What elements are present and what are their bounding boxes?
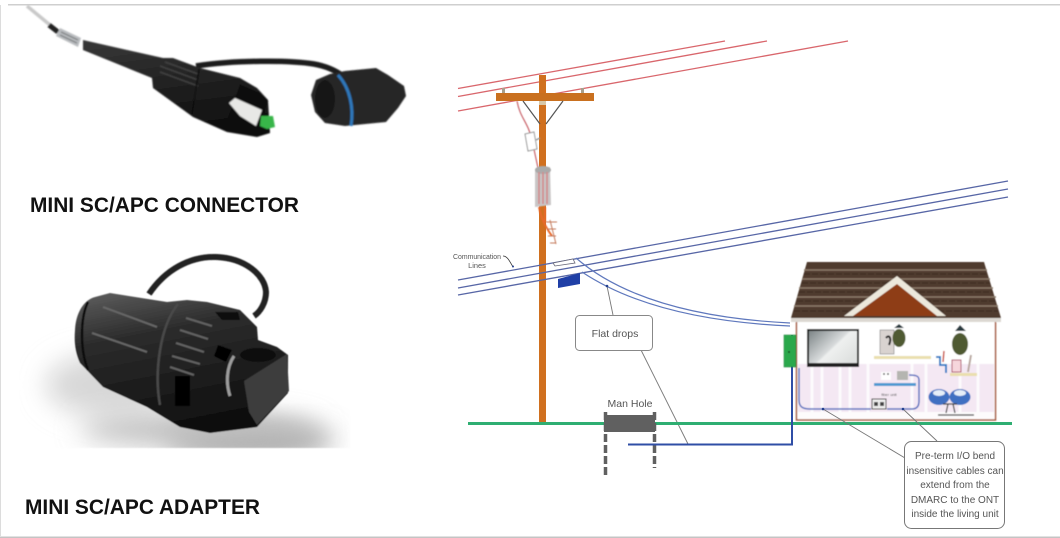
pre-term cable callout: insensitive cables can (906, 466, 1004, 477)
house (784, 262, 1001, 420)
connector ferrule (229, 98, 275, 129)
label: communication lines: Communication (453, 252, 501, 261)
panel: mini SC/APC adapter photo (45, 257, 335, 454)
chairs (928, 389, 974, 415)
ground line (468, 422, 1012, 425)
man hole: Man Hole (608, 398, 653, 410)
television (807, 329, 859, 367)
patch cable loop to dust cap (196, 61, 343, 76)
gable (844, 276, 946, 316)
pre-term cable callout: extend from the (920, 480, 990, 491)
flat drops callout (576, 285, 688, 444)
pre-term cable callout: DMARC to the ONT (911, 495, 999, 506)
adapter neck (227, 348, 276, 396)
pre-term cable callout: inside the living unit (911, 509, 999, 520)
pole-mounted closure (517, 101, 557, 244)
adapter barrel ridges (82, 302, 178, 405)
label: communication lines (453, 252, 514, 270)
adapter square cap (244, 354, 289, 425)
diagram: aerial and underground fibre drop (453, 41, 1012, 528)
power lines (458, 41, 848, 111)
man hole (604, 398, 655, 477)
heading: adapter: MINI SC/APC ADAPTER (25, 496, 260, 519)
utility pole (496, 75, 594, 423)
roof (791, 262, 1001, 322)
label: communication lines: Lines (468, 261, 486, 270)
demarcation box (784, 335, 796, 367)
cable label sleeve (49, 25, 81, 47)
pre-term cable callout: Pre-term I/O bend (915, 451, 995, 462)
communication lines (458, 181, 1008, 295)
aerial terminal (553, 259, 580, 288)
flat drop cables (576, 258, 790, 326)
wall shelves and decor (874, 324, 977, 376)
adapter collar grip (170, 312, 240, 406)
adapter tether loop (149, 257, 266, 316)
white fibre cable (27, 6, 50, 25)
wallpaper (798, 364, 994, 419)
house walls (796, 321, 996, 420)
pre-term cable callout (822, 408, 1004, 528)
flat drops callout: Flat drops (592, 328, 638, 340)
heading: connector: MINI SC/APC CONNECTOR (30, 194, 299, 217)
photo shadow (45, 353, 335, 454)
underground conduit (628, 335, 792, 444)
panel: mini SC/APC connector photo (27, 6, 406, 137)
indoor fibre run (799, 368, 919, 409)
ONT and wall outlets: fiber unit (881, 392, 898, 397)
connector body (83, 40, 270, 137)
dust cap (311, 68, 406, 126)
adapter silhouette (75, 293, 288, 433)
ONT and wall outlets (872, 371, 916, 409)
